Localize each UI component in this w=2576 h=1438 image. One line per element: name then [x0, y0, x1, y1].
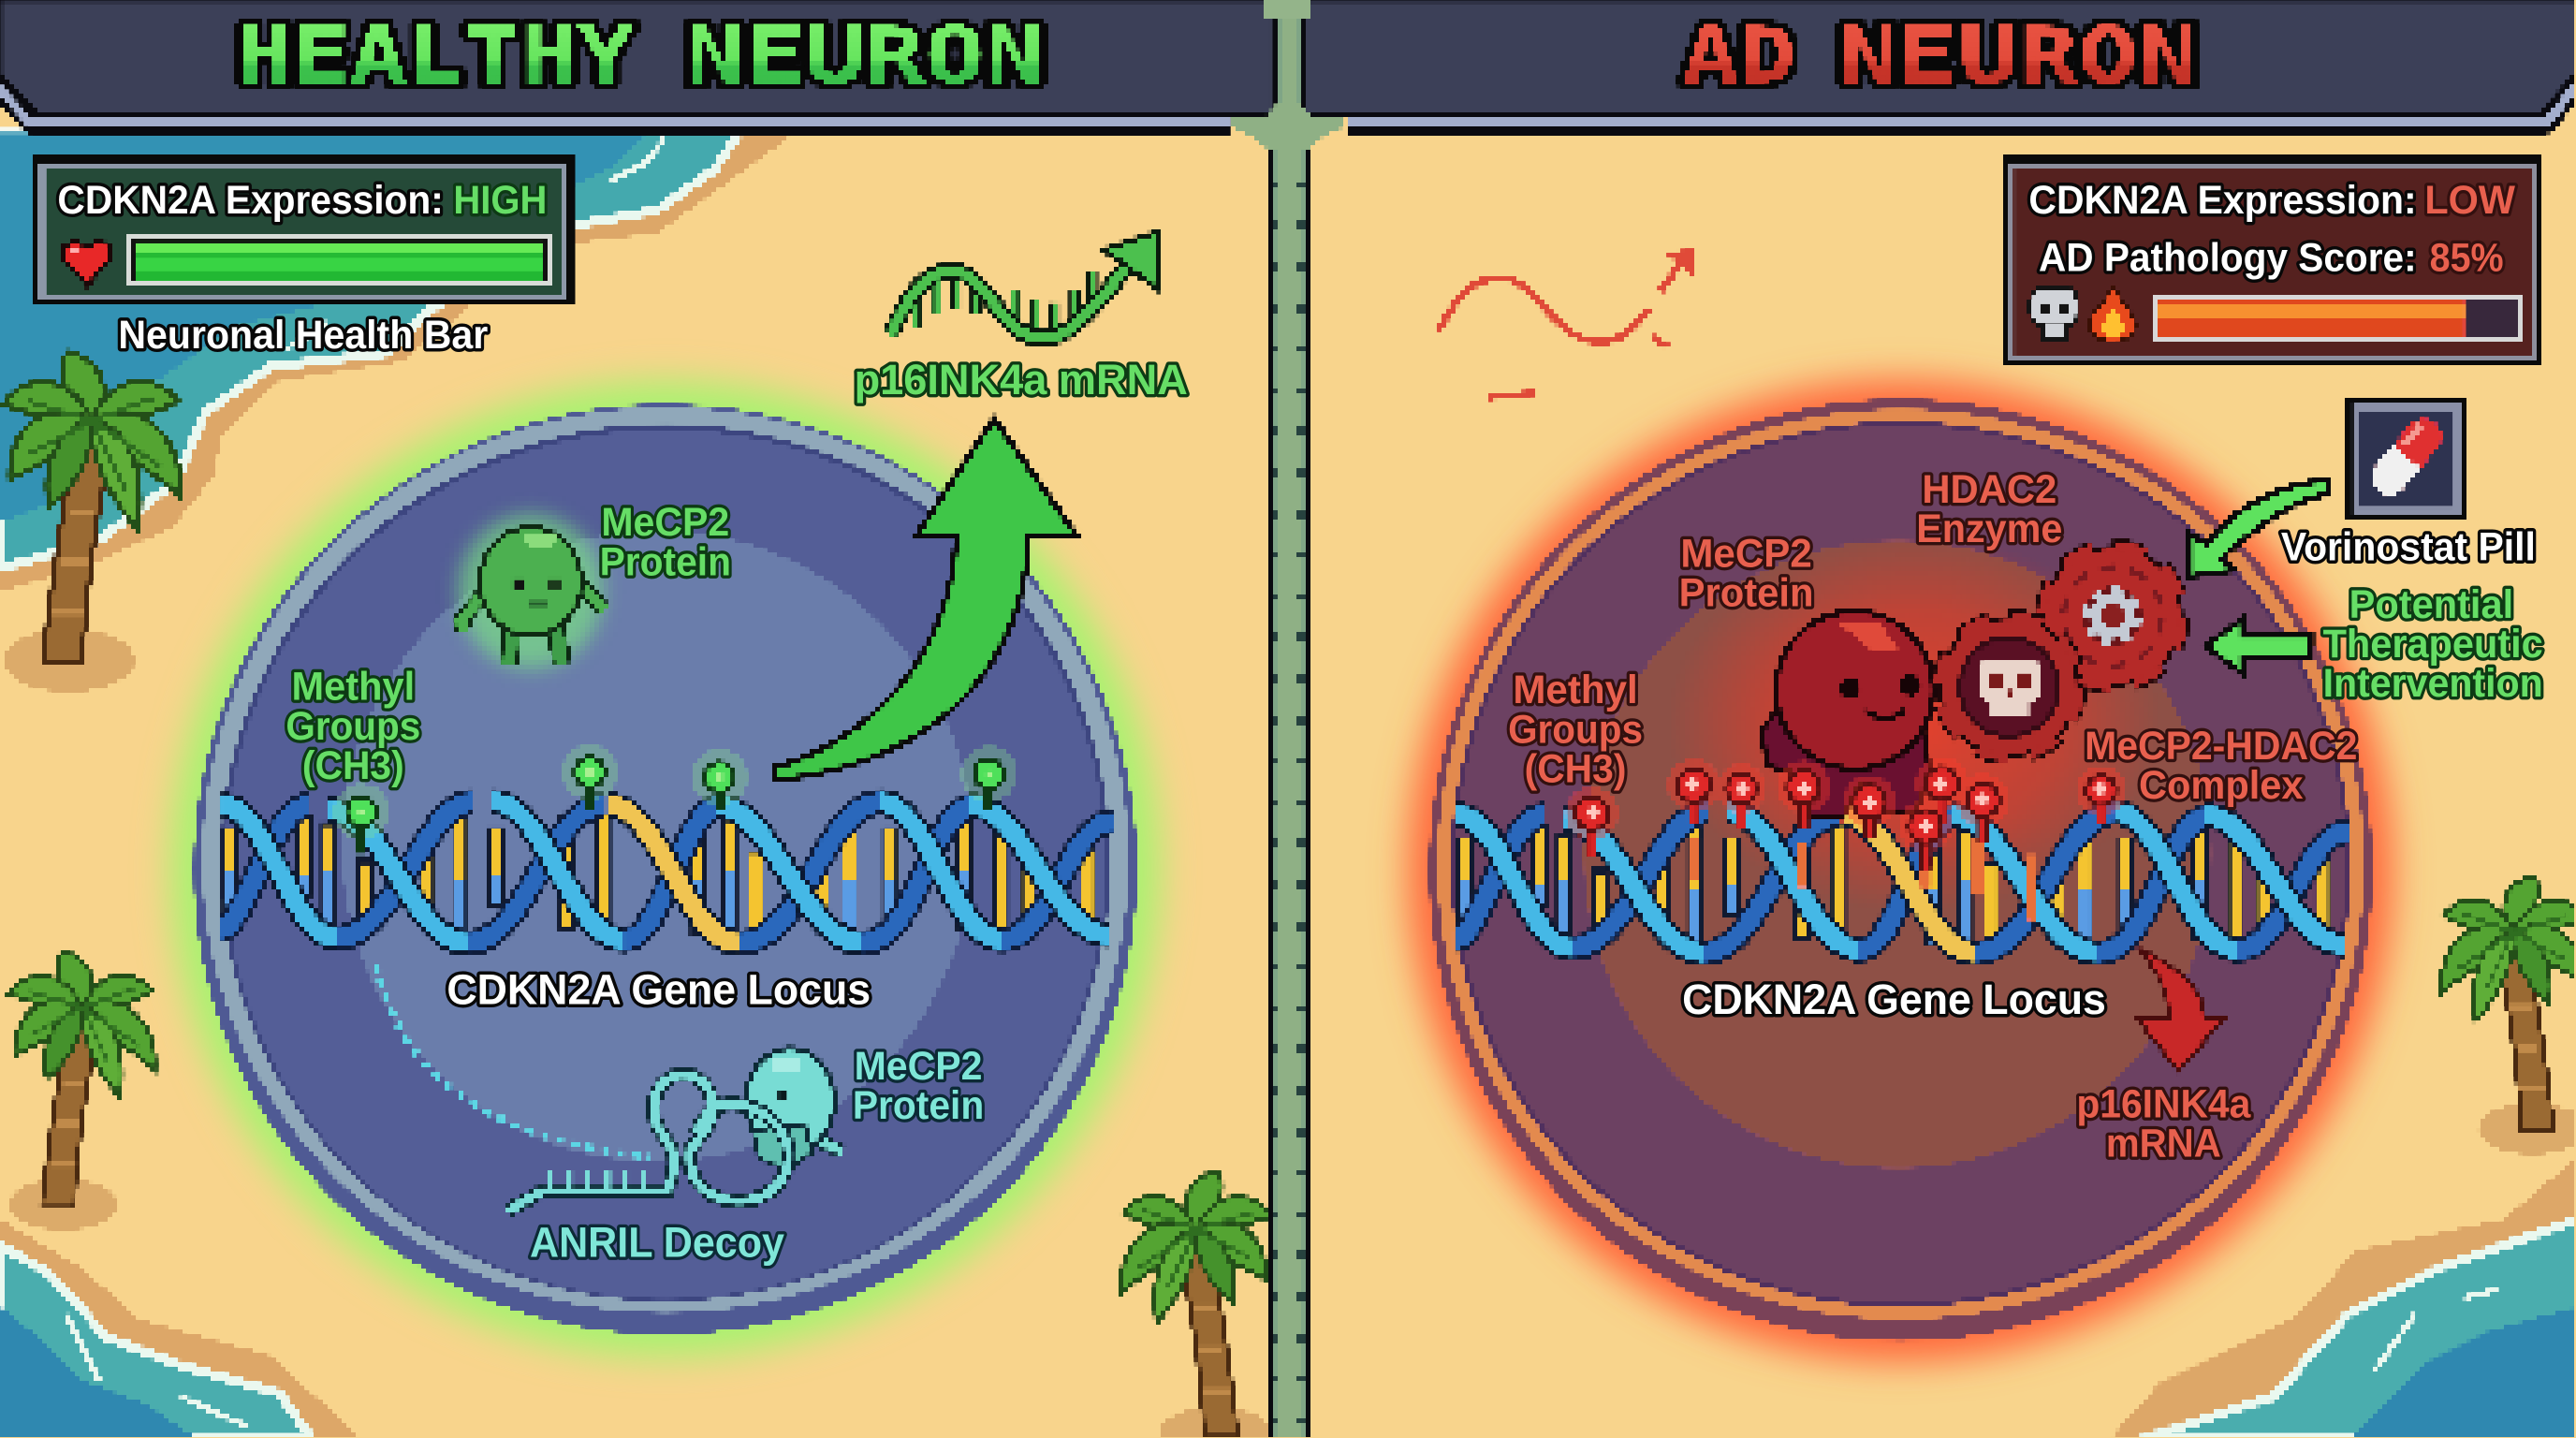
text: expression low and pathology score: CDKN2A Expression:	[2028, 178, 2417, 223]
panel: healthy neuron	[4, 231, 1271, 1438]
icon: ANRIL decoy RNA	[507, 1075, 789, 1211]
status box AD	[2006, 159, 2539, 363]
label: MeCP2 protein teal: MeCP2	[855, 1044, 982, 1089]
label: MeCP2-HDAC2 complex: MeCP2-HDAC2	[2085, 724, 2357, 769]
arrow: green therapeutic arrow	[2204, 620, 2311, 674]
status panel frame and pathology bar	[2006, 159, 2539, 363]
label: neuronal health bar: Neuronal Health Bar	[118, 313, 488, 358]
label: potential therapeutic intervention	[2323, 582, 2543, 706]
central divider	[1233, 0, 1343, 1438]
label: p16INK4a mRNA: p16INK4a mRNA	[855, 356, 1188, 404]
icon: methyl groups green	[333, 744, 1017, 855]
nucleus glow: red	[1408, 379, 2393, 1362]
label: CDKN2A gene locus: CDKN2A Gene Locus	[446, 965, 871, 1013]
label: Vorinostat pill: Vorinostat Pill	[2281, 524, 2536, 569]
labels: healthy neuron	[285, 356, 1188, 1267]
label: MeCP2 protein red: MeCP2	[1680, 531, 1812, 576]
label: methyl groups	[285, 665, 420, 788]
label: methyl groups: Groups	[285, 704, 420, 749]
chart: health bar full	[130, 237, 549, 285]
label: MeCP2-HDAC2 complex	[2085, 724, 2357, 808]
arrow: green curved arrow from pill	[2189, 479, 2330, 577]
icon: palm tree right	[2440, 875, 2576, 1154]
nucleus	[194, 404, 1136, 1334]
heading: AD NEURON: AD	[1682, 11, 1795, 101]
label: p16INK4a mRNA: mRNA	[2106, 1122, 2221, 1167]
label: methyl groups: (CH3)	[1525, 746, 1626, 791]
label: HDAC2 enzyme: HDAC2	[1922, 467, 2056, 512]
labels: AD neuron	[1508, 467, 2543, 1167]
text: expression low and pathology score: AD Pathology Score:	[2039, 236, 2417, 281]
icon: skull	[2030, 287, 2078, 340]
label: methyl groups	[1508, 668, 1643, 791]
label: p16INK4a mRNA: p16INK4a	[2076, 1081, 2251, 1126]
text: CDKN2A expression high: CDKN2A Expression:	[57, 178, 444, 223]
label: MeCP2 protein teal: Protein	[853, 1083, 984, 1128]
label: p16INK4a mRNA	[2076, 1081, 2251, 1167]
text: expression low and pathology score: LOW	[2424, 178, 2515, 223]
heading: AD NEURON	[1682, 11, 2198, 101]
panel: AD neuron	[1408, 248, 2576, 1362]
chart: pathology bar 85 percent	[2154, 296, 2520, 340]
arrow: big up arrow	[775, 419, 1077, 781]
AD artwork layer	[1429, 248, 2576, 1341]
label: methyl groups: Methyl	[1513, 668, 1638, 712]
chart: mRNA strand with arrow	[890, 231, 1158, 339]
icon: heart	[64, 240, 110, 286]
nucleus	[1429, 399, 2372, 1341]
nucleus glow: green	[171, 381, 1160, 1357]
label: MeCP2 protein teal	[853, 1044, 984, 1128]
label: MeCP2 protein red: Protein	[1679, 571, 1814, 616]
healthy artwork layer	[4, 231, 1271, 1438]
text: expression low and pathology score: 85%	[2430, 236, 2504, 281]
label: methyl groups: Methyl	[292, 665, 415, 710]
label: MeCP2 protein green: MeCP2	[601, 500, 729, 545]
status box healthy	[37, 159, 570, 302]
icon: MeCP2 protein green	[459, 514, 605, 668]
chart: faded mRNA strand	[1439, 248, 1695, 398]
heading: AD NEURON: NEURON	[1838, 11, 2198, 101]
heading: HEALTHY NEURON: NEURON	[685, 11, 1045, 101]
icon: flame	[2089, 286, 2136, 342]
status panel frame and health bar	[37, 159, 570, 302]
icon: MeCP2 protein teal	[746, 1049, 842, 1170]
chart: DNA helix CDKN2A gene locus AD	[1454, 812, 2349, 953]
icon: Vorinostat pill	[2349, 401, 2464, 518]
heading: HEALTHY NEURON	[237, 11, 1045, 101]
heading: HEALTHY NEURON: HEALTHY	[237, 11, 635, 101]
label: ANRIL decoy: ANRIL Decoy	[530, 1219, 785, 1267]
label: HDAC2 enzyme	[1916, 467, 2062, 551]
text: expression low and pathology score	[2028, 178, 2515, 281]
label: potential therapeutic intervention: Intervention	[2323, 661, 2543, 706]
text: CDKN2A expression high: HIGH	[453, 178, 547, 223]
label: potential therapeutic intervention: Therapeutic	[2323, 622, 2543, 667]
icon: methyl groups red	[1566, 757, 2126, 871]
icon: HDAC2 gear with cog	[2041, 544, 2185, 688]
label: MeCP2 protein red	[1679, 531, 1814, 616]
chart: DNA helix CDKN2A gene locus healthy	[218, 801, 1114, 943]
label: methyl groups: Groups	[1508, 707, 1643, 752]
header bars and title backing	[0, 0, 2576, 124]
chart: dashed path to ANRIL	[376, 964, 649, 1157]
label: MeCP2 protein green	[600, 500, 731, 584]
label: potential therapeutic intervention: Potential	[2349, 582, 2513, 627]
label: MeCP2-HDAC2 complex: Complex	[2139, 763, 2304, 808]
icon: skull gear	[1937, 614, 2082, 759]
icon: palm trees left	[4, 352, 1271, 1438]
icon: MeCP2 protein red	[1761, 611, 1934, 816]
label: HDAC2 enzyme: Enzyme	[1916, 506, 2062, 551]
label: CDKN2A gene locus: CDKN2A Gene Locus	[1682, 976, 2106, 1023]
arrow: red down arrow	[2137, 948, 2224, 1071]
label: methyl groups: (CH3)	[302, 743, 404, 788]
label: MeCP2 protein green: Protein	[600, 539, 731, 584]
